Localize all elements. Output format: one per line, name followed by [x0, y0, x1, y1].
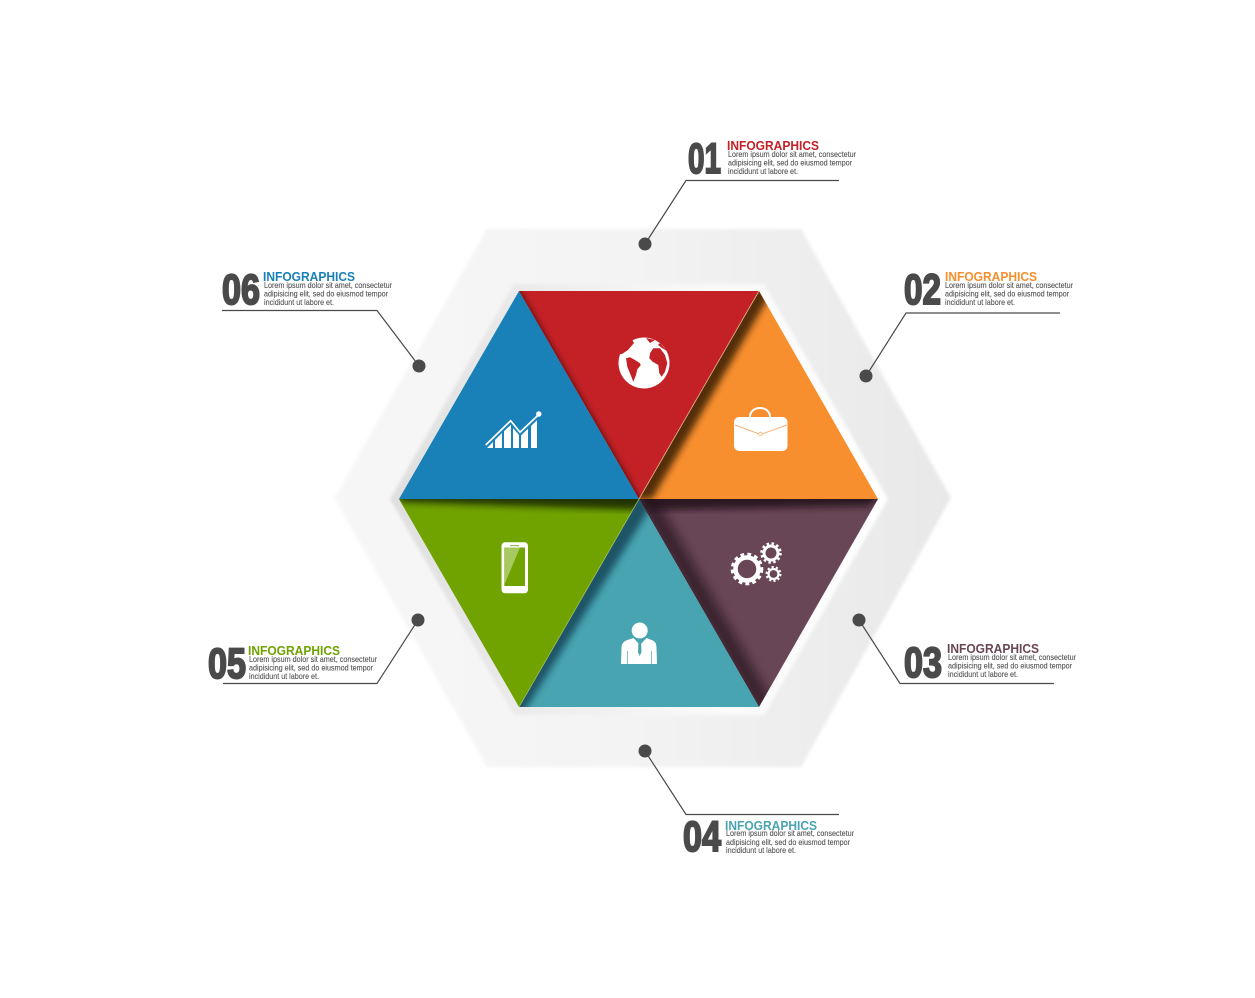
triangle: red [519, 291, 758, 499]
triangle: teal [510, 490, 759, 712]
icon: businessman [621, 622, 657, 664]
callout 02 [860, 266, 1073, 382]
callout 05: incididunt ut labore et. [249, 672, 319, 681]
callout 03: incididunt ut labore et. [948, 670, 1018, 679]
callout 04: 04 [683, 813, 721, 861]
inner hexagon rim [390, 284, 888, 715]
callout 05: 05 [208, 640, 246, 688]
callout 01: 01 [688, 135, 721, 183]
icon: smartphone [502, 542, 528, 593]
callout 03: Lorem ipsum dolor sit amet, consectetur [948, 653, 1076, 662]
outer hexagon frame [334, 229, 951, 767]
icon: gears [732, 544, 780, 584]
callout 04: Lorem ipsum dolor sit amet, consectetur [726, 829, 854, 838]
callout 02: Lorem ipsum dolor sit amet, consectetur [945, 281, 1073, 290]
callout 01: Lorem ipsum dolor sit amet, consectetur [728, 150, 856, 159]
callout 03: adipisicing elit, sed do eiusmod tempor [948, 662, 1072, 670]
icon: growth chart [486, 411, 542, 448]
callout 02: incididunt ut labore et. [945, 298, 1015, 307]
callout 02: adipisicing elit, sed do eiusmod tempor [945, 290, 1069, 298]
callout 05: adipisicing elit, sed do eiusmod tempor [249, 664, 373, 672]
icon: briefcase [734, 408, 788, 451]
triangle: green [395, 490, 645, 707]
callout 02: INFOGRAPHICS [945, 270, 1037, 284]
callout 03: INFOGRAPHICS [947, 642, 1039, 656]
callout 01: INFOGRAPHICS [727, 139, 819, 153]
callout 04: adipisicing elit, sed do eiusmod tempor [726, 838, 850, 847]
callout 04: incididunt ut labore et. [726, 846, 796, 855]
icon: globe [618, 338, 670, 388]
callout 01: adipisicing elit, sed do eiusmod tempor [728, 158, 852, 168]
callout 03: 03 [904, 639, 942, 687]
triangle: orange [629, 281, 878, 499]
callout 05: Lorem ipsum dolor sit amet, consectetur [249, 655, 377, 664]
callout 06 [222, 266, 426, 372]
callout 02: 02 [904, 266, 941, 314]
callout 05 [208, 614, 424, 688]
callout 06: adipisicing elit, sed do eiusmod tempor [264, 290, 388, 298]
callout 04 [638, 744, 854, 861]
callout 06: incididunt ut labore et. [264, 298, 334, 307]
triangle: plum [639, 499, 878, 707]
callout 01: incididunt ut labore et. [728, 167, 798, 176]
callout 03 [852, 614, 1076, 687]
callout 06: Lorem ipsum dolor sit amet, consectetur [264, 281, 392, 290]
callout 05: INFOGRAPHICS [248, 644, 340, 658]
callout 06: 06 [222, 266, 260, 314]
callout 04: INFOGRAPHICS [725, 819, 817, 833]
callout 06: INFOGRAPHICS [263, 270, 355, 284]
triangle: blue [399, 291, 639, 499]
callout 01 [638, 135, 856, 250]
